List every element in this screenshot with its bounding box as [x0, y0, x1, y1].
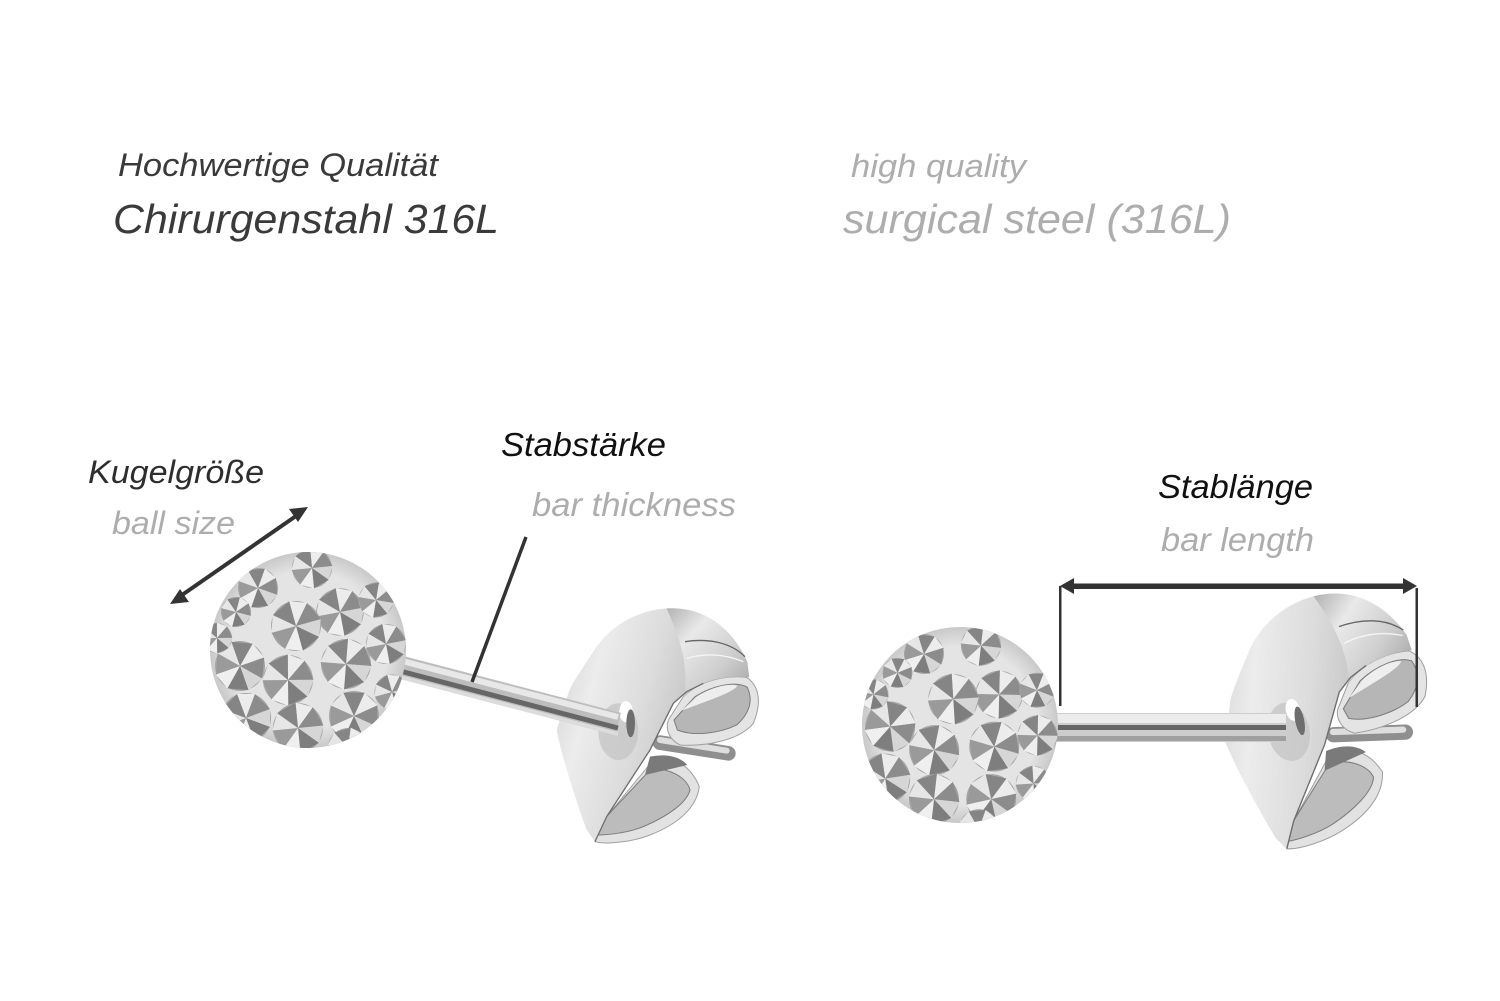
- heading: German quality: [113, 147, 499, 242]
- bar length text: bar length: [1161, 521, 1314, 558]
- bar thickness text: bar thickness: [532, 486, 736, 523]
- German subtitle: Hochwertige Qualität: [118, 147, 439, 183]
- Stablänge text: Stablänge: [1158, 468, 1313, 505]
- left earring: [198, 544, 758, 843]
- butterfly back, right: [1201, 578, 1454, 858]
- English main title: surgical steel (316L): [843, 196, 1231, 242]
- dimension arrow: bar length: [1059, 578, 1418, 707]
- stem, right: [1056, 713, 1286, 742]
- Stabstärke text: Stabstärke: [501, 426, 666, 463]
- heading: English quality: [843, 148, 1231, 242]
- pointer line: bar thickness: [472, 537, 526, 682]
- crystal ball, left: [198, 544, 411, 775]
- right earring: [826, 578, 1454, 869]
- English subtitle: high quality: [851, 148, 1028, 184]
- crystal ball, right: [826, 598, 1083, 869]
- label: bar thickness: [501, 426, 736, 523]
- label: bar length: [1158, 468, 1314, 558]
- label: ball size: [88, 454, 264, 541]
- German main title: Chirurgenstahl 316L: [113, 196, 499, 242]
- butterfly back, left: [557, 608, 758, 843]
- stem, left: [400, 661, 618, 734]
- Kugelgröße text: Kugelgröße: [88, 454, 264, 490]
- arrow: ball size: [170, 507, 308, 604]
- ball size text: ball size: [112, 505, 235, 541]
